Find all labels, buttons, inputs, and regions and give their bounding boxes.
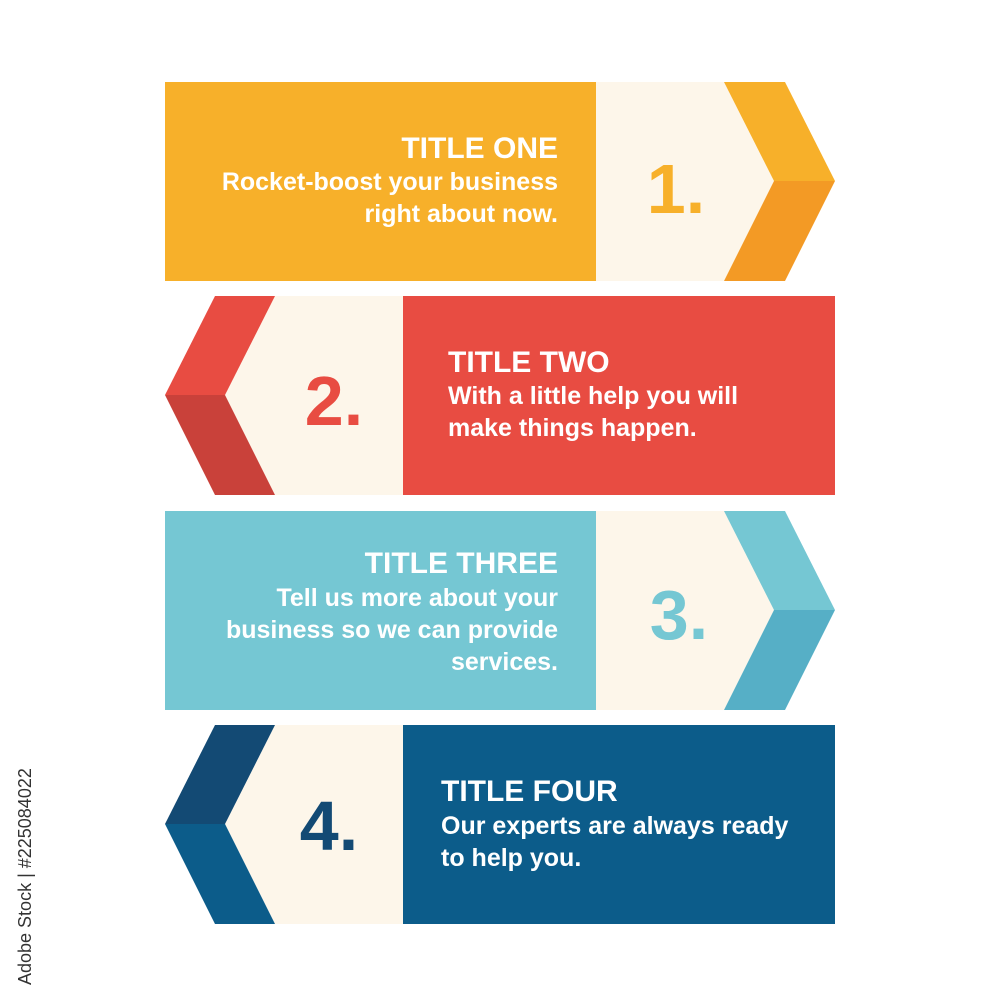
text block: title one: right about now. [365, 200, 558, 228]
text block: title three: TITLE THREE [365, 547, 558, 580]
number 1: 1. [647, 150, 705, 228]
text block: title four: TITLE FOUR [441, 775, 618, 808]
watermark id: Adobe Stock | #225084022 [15, 768, 35, 985]
text block: title one [222, 132, 558, 228]
step 3 [165, 511, 835, 710]
step 1 [165, 82, 835, 281]
panel: step 4 number area [225, 725, 403, 924]
arrow: step 3 [724, 511, 835, 710]
text block: title three: Tell us more about your [276, 584, 558, 612]
panel: step 2 main [403, 296, 835, 495]
step 4 [165, 725, 835, 924]
number 3: 3. [650, 576, 708, 654]
number 2: 2. [305, 362, 363, 440]
text block: title one: TITLE ONE [401, 132, 558, 165]
arrow: step 2 [165, 296, 275, 495]
text block: title three: business so we can provide [226, 616, 558, 644]
text block: title two: TITLE TWO [448, 346, 610, 379]
panel: step 2 number area [225, 296, 403, 495]
arrow: step 1 [724, 82, 835, 281]
panel: step 1 number area [596, 82, 774, 281]
arrow: step 4 [165, 725, 275, 924]
step 2 [165, 296, 835, 495]
text block: title one: Rocket-boost your business [222, 168, 558, 196]
text block: title two [448, 346, 738, 442]
panel: step 1 main [165, 82, 596, 281]
panel: step 3 main [165, 511, 596, 710]
text block: title four: Our experts are always ready [441, 812, 789, 840]
text block: title three: services. [451, 648, 558, 676]
text block: title two: With a little help you will [448, 382, 738, 410]
number 4: 4. [300, 787, 358, 865]
text block: title three [226, 547, 558, 676]
panel: step 3 number area [596, 511, 774, 710]
panel: step 4 main [403, 725, 835, 924]
text block: title four [441, 775, 789, 872]
text block: title four: to help you. [441, 844, 581, 872]
text block: title two: make things happen. [448, 414, 697, 442]
